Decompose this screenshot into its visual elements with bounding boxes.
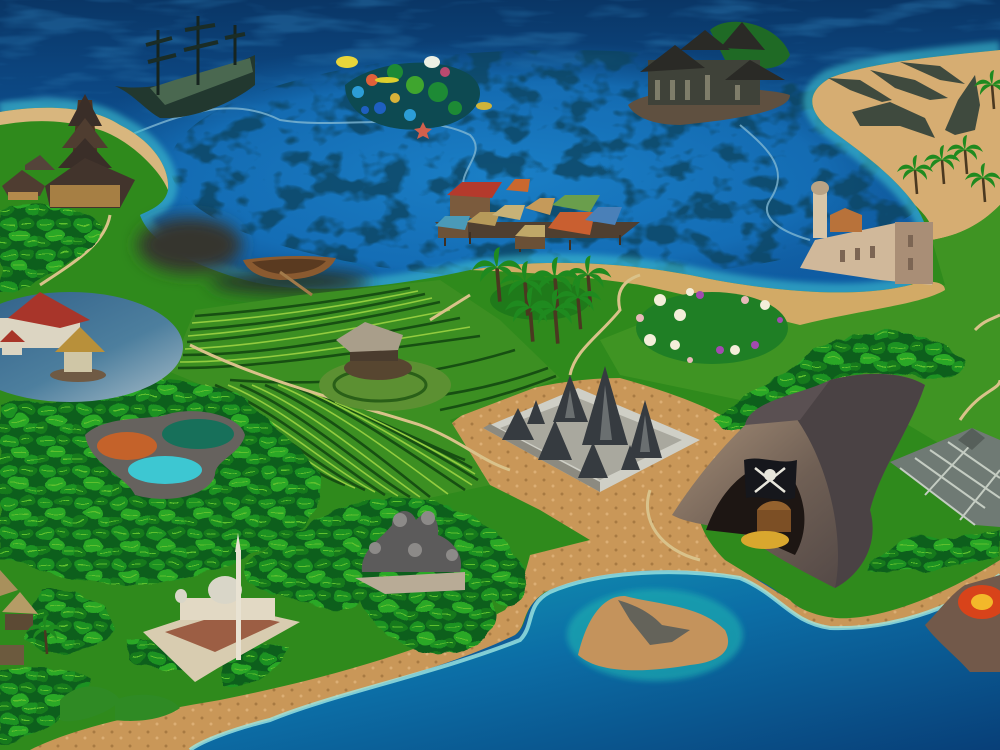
pagoda complex xyxy=(2,94,135,208)
lake with pavilions xyxy=(0,292,183,402)
coral reef xyxy=(336,56,492,139)
jungle south of pyramid xyxy=(865,530,1000,572)
northern beach strip xyxy=(470,263,945,325)
prambanan temple xyxy=(483,366,700,492)
huts left edge xyxy=(0,570,63,665)
stepped pyramid xyxy=(890,428,1000,527)
jungle masses xyxy=(0,205,1000,745)
terraced rice fields xyxy=(170,280,560,500)
jungle bottom left xyxy=(0,667,90,745)
jungle left xyxy=(0,378,322,584)
volcano xyxy=(925,575,1000,672)
pirate flag xyxy=(744,459,797,500)
treasure cave mountain xyxy=(672,374,925,588)
reef network xyxy=(170,50,950,280)
jungle around statue xyxy=(244,497,527,655)
jungle hedge left xyxy=(25,589,115,654)
right green hillside xyxy=(600,205,1000,480)
bottom bay xyxy=(190,572,1000,750)
field paths xyxy=(40,215,1000,560)
jungle arc above cave xyxy=(715,332,965,431)
fortress island xyxy=(628,22,790,125)
shadow swamp xyxy=(138,217,370,294)
upper right beach xyxy=(812,50,1000,240)
mosque xyxy=(143,533,300,682)
flower bush xyxy=(636,288,788,364)
crocodiles xyxy=(828,62,980,138)
jungle top left xyxy=(0,205,103,292)
lighthouse fort xyxy=(800,181,933,285)
treasure chest xyxy=(741,501,791,549)
central sand plain xyxy=(30,378,1000,750)
gazebo on terraces xyxy=(319,322,451,411)
top left island sand rim xyxy=(0,108,168,190)
beach palm trees xyxy=(897,70,1000,202)
green meadow patches xyxy=(60,686,180,721)
hedges near mosque xyxy=(125,639,290,686)
sea routes xyxy=(130,108,810,240)
monkey statues xyxy=(355,511,465,594)
sailing ship xyxy=(115,16,255,118)
stilt village xyxy=(435,179,640,252)
crater pools xyxy=(85,411,245,499)
riverside palm grove xyxy=(472,247,611,344)
shoreline glow xyxy=(0,50,1000,292)
lizard island xyxy=(567,589,743,681)
rowing boat xyxy=(243,256,336,295)
